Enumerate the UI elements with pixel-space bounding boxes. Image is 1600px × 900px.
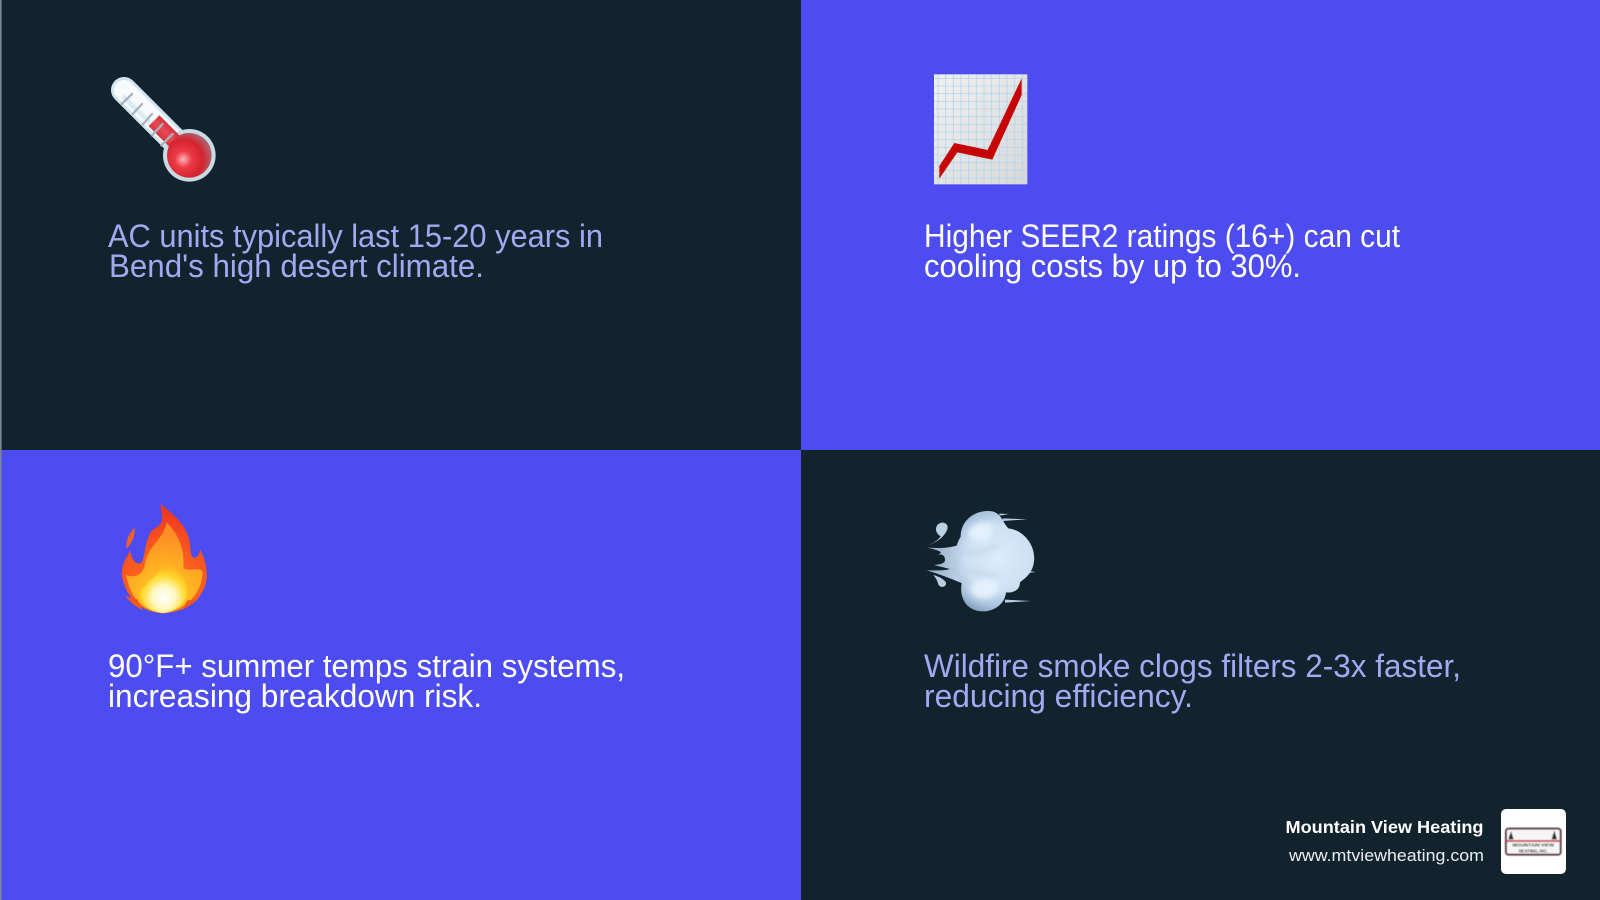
panel: lifespan [0,0,801,450]
panel: smoke [801,450,1600,900]
text: smoke [924,648,1461,714]
icon: thermometer [121,90,216,182]
logo [1501,809,1566,874]
text: smoke: reducing efficiency. [924,678,1193,714]
text: efficiency: Higher SEER2 ratings (16+) can cut [924,218,1400,254]
text: lifespan: AC units typically last 15-20 years in [108,218,603,254]
text: heat: 90°F+ summer temps strain systems, [108,648,625,684]
logo: MOUNTAIN VIEW [1512,843,1554,849]
text: lifespan [108,218,603,284]
text: efficiency: cooling costs by up to 30%. [924,248,1301,284]
icon: rising chart [934,74,1027,184]
brand url: www.mtviewheating.com [1288,847,1484,865]
text: lifespan: Bend's high desert climate. [109,248,484,284]
logo: HEATING, INC. [1519,848,1548,854]
text: efficiency [924,218,1400,284]
panel: efficiency [801,0,1600,450]
panel: heat [0,450,801,900]
icon: smoke cloud [927,511,1036,611]
brand name: Mountain View Heating [1286,817,1484,837]
icon: fire [122,504,207,613]
text: heat: increasing breakdown risk. [108,678,482,714]
text: heat [108,648,625,714]
brand block [1286,809,1566,874]
text: smoke: Wildfire smoke clogs filters 2-3x faster, [924,648,1461,684]
